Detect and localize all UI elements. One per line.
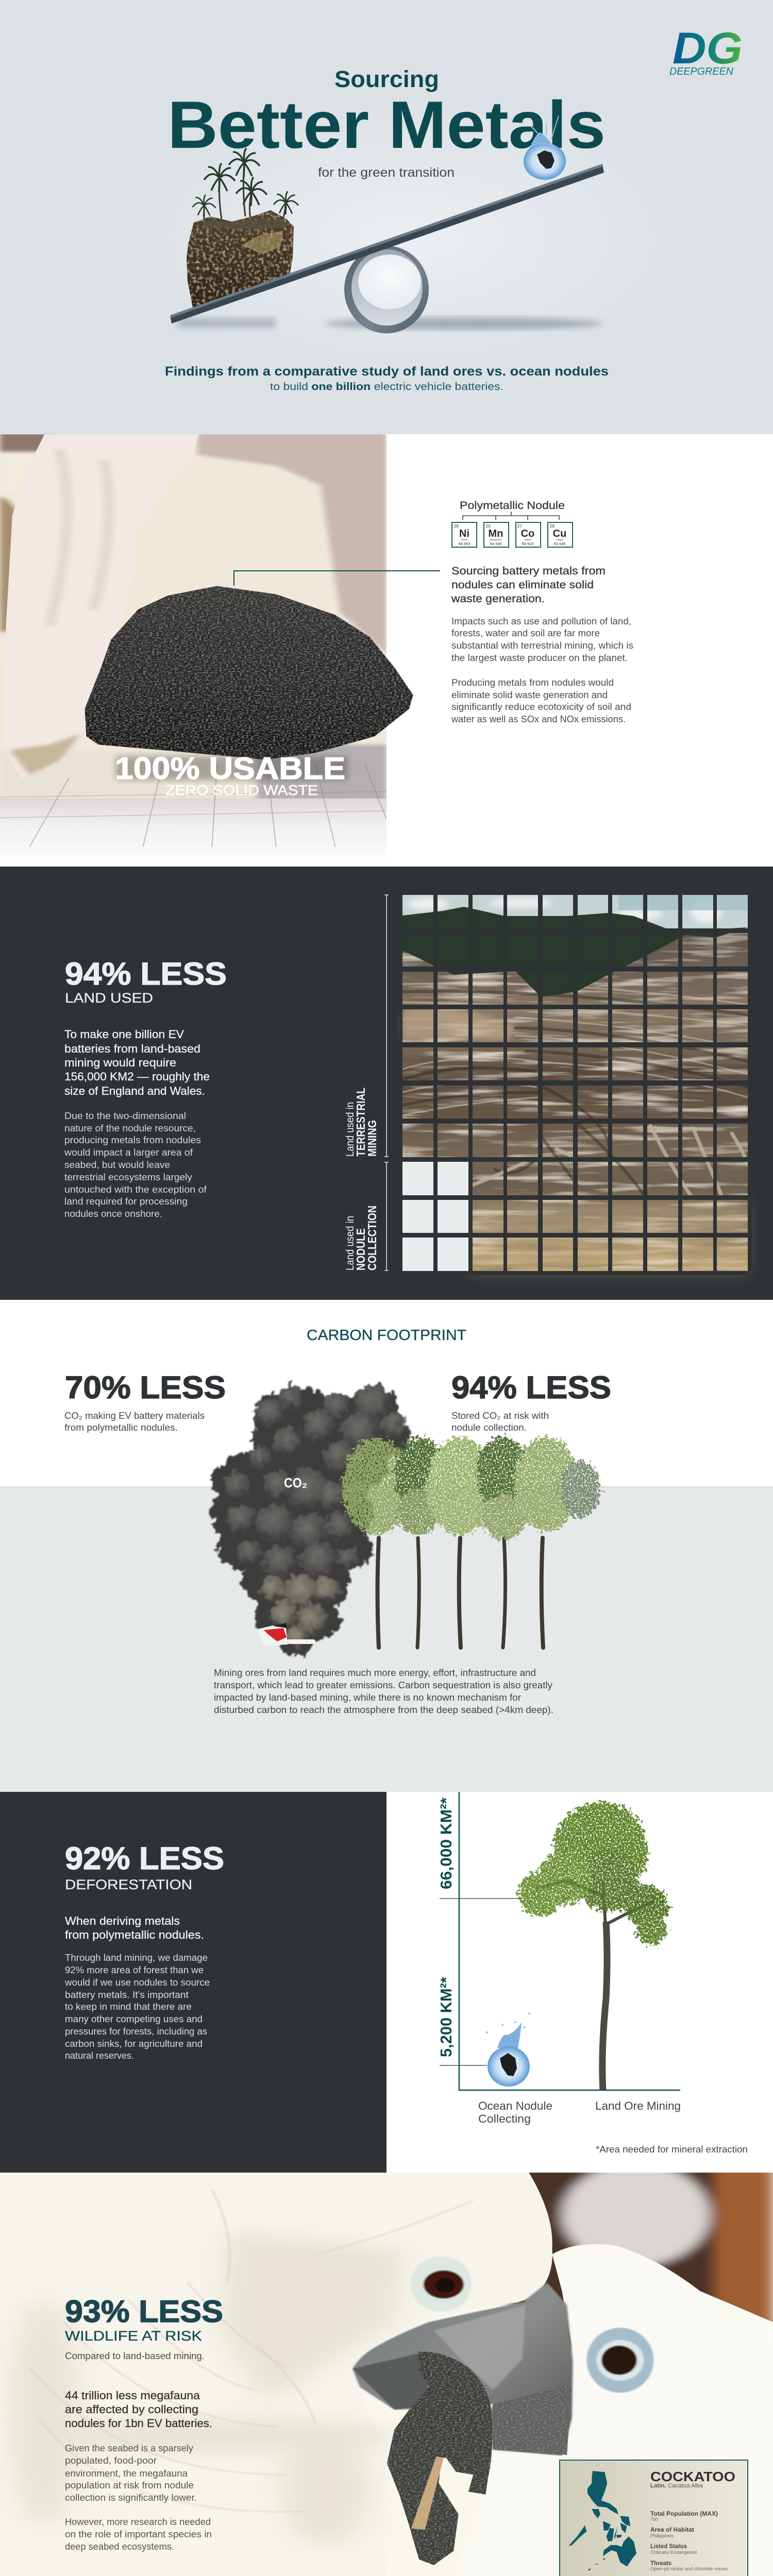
text: findings: Findings from a comparative study of land ores vs. ocean nodules [165,364,609,379]
logo: DeepGreen top right: DG [673,24,743,73]
text: wildlife body: environment, the megafauna [65,2468,188,2479]
element: cobalt: Cobalt [524,538,531,541]
text: deforestation body: carbon sinks, for agriculture and [65,2039,203,2049]
text: megafauna: nodules for 1bn EV batteries. [65,2417,212,2430]
element: copper: 63.546 [554,541,565,546]
text: one billion batteries: to build one billion electric vehicle batteries. [270,381,503,393]
value: 5,200 km2: 5,200 KM²* [437,1976,455,2057]
text: land body: Due to the two-dimensional [64,1111,186,1121]
stat: 93% less wildlife: WILDLIFE AT RISK [65,2328,202,2344]
element: copper: Copper [556,538,564,541]
logo: DeepGreen top right: DEEPGREEN [669,66,734,77]
text: carbon body: impacted by land-based mining, while there is no known mechanism for [214,1692,521,1703]
element: copper: 29 [550,524,554,529]
text: land body: untouched with the exception of [64,1184,207,1195]
text: carbon body [214,1668,553,1715]
text: wildlife body: population at risk from nodule [65,2480,194,2490]
title: Sourcing: Sourcing [334,66,439,92]
title: Better Metals: Better Metals [167,87,606,162]
claw [387,2352,492,2565]
stat: 94% less stored CO2: Stored CO₂ at risk with [451,1411,549,1421]
diagram: polymetallic nodule elements: Polymetallic Nodule [460,500,565,512]
element: manganese: Manganese [490,538,502,541]
text: sourcing statement: nodules can eliminate solid [451,579,594,591]
heading: 100% usable: 100% USABLE [115,751,345,786]
element: manganese: Mn [489,528,503,539]
text: wildlife body: Given the seabed is a sparsely [65,2443,193,2453]
label: terrestrial mining [344,1088,379,1157]
stat: 93% less wildlife [65,2294,223,2361]
text: megafauna: 44 trillion less megafauna [65,2389,200,2402]
stat: 94% less stored CO2: 94% LESS [451,1370,611,1405]
panel: wildlife [0,2164,773,2576]
stat: 94% less land: 94% LESS [65,956,227,991]
stat: 94% less land [65,956,227,1006]
element: copper [548,522,573,547]
icon: seesaw wheel [344,246,429,333]
text: land requirement: size of England and Wales. [64,1084,205,1097]
card: cockatoo facts: Open-pit nickel and chromite mines [650,2566,728,2572]
axis label: ocean nodule collecting [478,2099,552,2125]
element: manganese: 25 [486,524,491,529]
axis label: ocean nodule collecting: Collecting [478,2112,531,2125]
text: megafauna [65,2389,212,2430]
icon: chainsaw [258,1623,315,1646]
card: cockatoo facts: Critically Endangered [650,2550,697,2555]
illustration: row of trees [342,1436,600,1648]
tick: 5,200 level [440,2065,487,2066]
text: deforestation body: pressures for forests, including as [65,2026,207,2037]
icon: water drop with nodule [486,2012,530,2087]
label: CO2: CO₂ [284,1475,307,1490]
photo grid: open pit mine [399,891,752,1275]
text: megafauna: are affected by collecting [65,2403,198,2416]
grid cells: nodule collection land [402,1162,468,1271]
text: impacts body: significantly reduce ecotoxicity of soil and [451,702,631,712]
element: nickel: 28 [454,524,459,529]
shadows under seesaw [178,317,603,330]
panel: land used [0,867,773,1300]
stat: 70% less CO2: CO₂ making EV battery materials [64,1411,205,1421]
element: cobalt: 58.933 [522,541,533,546]
text: land body: terrestrial ecosystems largely [64,1172,192,1182]
card: cockatoo facts: Listed Status [650,2543,687,2550]
text: sourcing statement: waste generation. [451,593,545,605]
text: impacts body: water as well as SOx and NOx emissions. [451,714,626,724]
axis label: land ore mining: Land Ore Mining [595,2099,681,2112]
heading: carbon footprint: CARBON FOOTPRINT [307,1327,466,1344]
element: manganese [484,522,509,547]
tick: 66,000 level [440,1898,522,1899]
card: cockatoo facts: COCKATOO [650,2469,735,2484]
text: land body [64,1111,207,1219]
grid gaps [399,891,752,1275]
text: deforestation body: battery metals. It's important [65,1990,189,2000]
card: cockatoo facts [560,2460,748,2576]
text: impacts body [451,616,633,724]
stat: 92% less deforestation [65,1841,224,1892]
text: deriving metals: from polymetallic nodules. [65,1928,204,1941]
icon: water drop with nodule [524,116,566,180]
text: deriving metals [65,1914,204,1941]
photo: hand holding nodule [0,433,413,866]
element: cobalt: 27 [517,524,522,529]
text: land requirement: 156,000 KM2 — roughly the [64,1070,210,1083]
chart: area comparison [437,1792,748,2155]
axis label: ocean nodule collecting: Ocean Nodule [478,2099,552,2112]
bracket: nodule collection [384,1162,389,1270]
text: wildlife body: deep seabed ecosystems. [65,2541,174,2552]
callout line [234,571,440,586]
text: impacts body: the largest waste producer on the planet. [451,653,628,663]
stat: 92% less deforestation: DEFORESTATION [65,1877,192,1892]
panel: hero [0,0,773,434]
text: land requirement: mining would require [64,1056,176,1069]
card: cockatoo facts: Area of Habitat [650,2526,694,2533]
element: cobalt [516,522,541,547]
text: deriving metals: When deriving metals [65,1914,180,1927]
card: cockatoo facts: Threats [650,2560,671,2567]
label: terrestrial mining: MINING [365,1120,379,1157]
photo: cockatoos [0,2164,773,2576]
text: land requirement: batteries from land-based [64,1042,200,1055]
stat: 70% less CO2: from polymetallic nodules. [64,1422,178,1433]
element: nickel: Nickel [461,538,467,541]
text: deforestation body: to keep in mind that there are [65,2002,192,2012]
label: nodule collection [344,1206,379,1270]
text: land body: seabed, but would leave [64,1160,170,1170]
label: nodule collection: Land used in [344,1216,356,1270]
panel: carbon footprint [0,1300,773,1792]
text: land body: producing metals from nodules [64,1135,201,1145]
text: land body: would impact a larger area of [64,1147,193,1158]
stat: 70% less CO2: 70% LESS [65,1370,226,1405]
icon: seesaw plank [170,164,604,324]
stat: 94% less land: LAND USED [65,990,153,1006]
stat: 92% less deforestation: 92% LESS [65,1841,224,1876]
axes [459,1792,680,2090]
diagram: polymetallic nodule elements [452,500,573,547]
text: impacts body: forests, water and soil are far more [451,628,600,638]
element: cobalt: Co [521,528,534,539]
text: deforestation body [64,1953,210,2061]
illustration: smoke cloud [210,1384,410,1656]
card: cockatoo facts: 750 [650,2517,658,2522]
text: impacts body: Impacts such as use and pollution of land, [451,616,631,626]
label: terrestrial mining: Land used in [344,1102,356,1157]
text: land body: nature of the nodule resource, [64,1123,196,1133]
stat: 93% less wildlife: 93% LESS [65,2294,223,2329]
element: nickel: Ni [459,528,469,539]
element: nickel [452,522,477,547]
chart: land use grid [344,891,752,1275]
text: land requirement [64,1028,210,1097]
value: 66,000 km2: 66,000 KM²* [437,1797,455,1889]
text: impacts body: Producing metals from nodules would [451,677,614,688]
text: impacts body: substantial with terrestrial mining, which is [451,640,633,651]
panel: nodule zero waste [0,434,633,847]
subheading: zero solid waste: ZERO SOLID WASTE [165,782,318,798]
text: impacts body: eliminate solid waste generation and [451,690,608,700]
text: sourcing statement: Sourcing battery metals from [451,565,606,577]
card: cockatoo facts: Philippines [650,2533,674,2539]
map: Philippines [568,2471,636,2570]
text: wildlife body: populated, food-poor [65,2455,157,2466]
label: terrestrial mining: TERRESTRIAL [354,1088,367,1157]
text: land body: nodules once onshore. [64,1209,162,1219]
eye left [411,2256,472,2312]
card: cockatoo facts: Total Population (MAX) [650,2510,718,2517]
text: wildlife body [65,2443,212,2552]
text: wildlife body: However, more research is needed [65,2517,211,2527]
subtitle: for the green transition [318,165,455,180]
text: land body: land required for processing [64,1196,188,1207]
text: deforestation body: natural reserves. [65,2050,134,2061]
text: wildlife body: on the role of important species in [65,2529,212,2539]
eye right [586,2328,653,2393]
text: carbon body: transport, which lead to greater emissions. Carbon sequestration is also greatly [214,1680,552,1690]
label: nodule collection: NODULE [354,1228,367,1270]
text: deforestation body: would if we use nodules to source [64,1977,210,1988]
text: deforestation body: many other competing uses and [65,2014,203,2024]
card: cockatoo facts: Latin. Cacatua Alba [650,2483,703,2489]
stat: 94% less stored CO2: nodule collection. [451,1422,527,1433]
text: wildlife body: collection is significantly lower. [65,2493,197,2503]
text: carbon body: Mining ores from land requires much more energy, effort, infrastructure and [214,1668,536,1678]
text: sourcing statement [451,565,606,605]
stat: 70% less CO2 [64,1370,226,1433]
stat: 94% less stored CO2 [451,1370,611,1433]
beak [352,2282,573,2455]
element: manganese: 54.938 [490,541,501,546]
element: copper: Cu [553,528,566,539]
text: deforestation body: Through land mining, we damage [65,1953,208,1963]
text: deforestation body: 92% more area of forest than we [65,1965,204,1975]
panel: deforestation [0,1792,773,2173]
stat: 93% less wildlife: Compared to land-based mining. [65,2351,205,2361]
footnote: *Area needed for mineral extraction [596,2144,748,2155]
bracket: terrestrial mining [384,895,389,1157]
text: land requirement: To make one billion EV [64,1028,184,1041]
icon: land block with palm trees [187,148,298,308]
element: nickel: 58.693 [459,541,470,546]
text: carbon body: disturbed carbon to reach the atmosphere from the deep seabed (>4km deep). [214,1705,553,1715]
label: nodule collection: COLLECTION [365,1206,379,1270]
illustration: tall tree [518,1802,668,2090]
